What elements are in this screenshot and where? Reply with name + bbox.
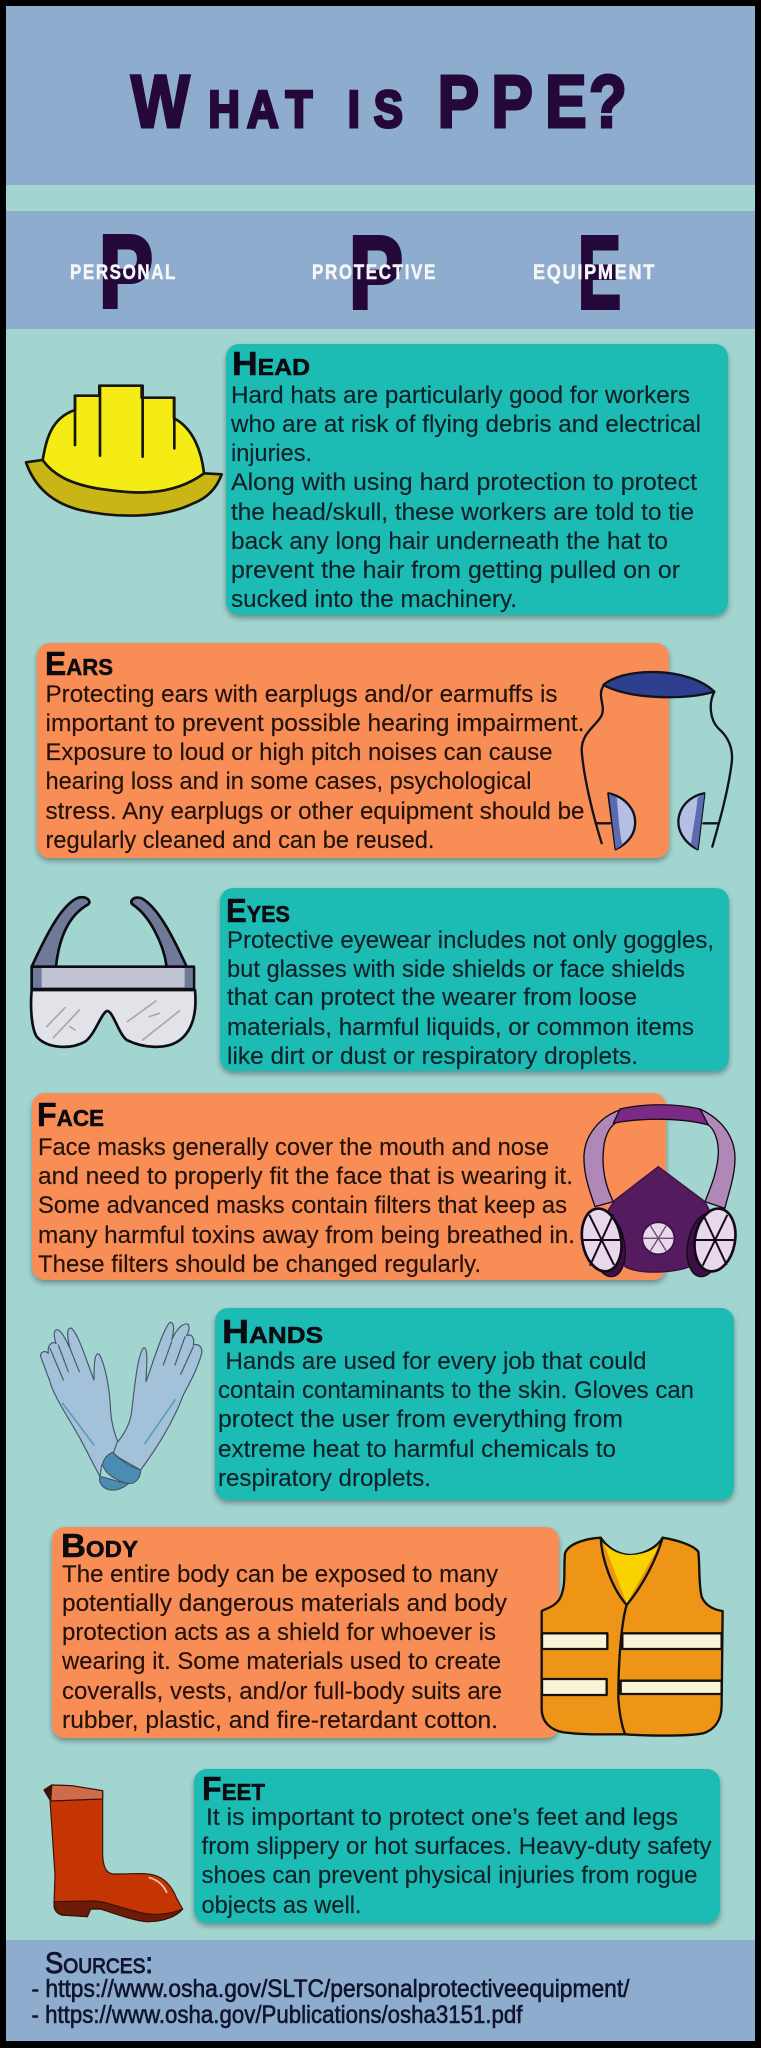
panel: head [226,344,728,615]
text: head body: prevent the hair from getting pulled on or [231,557,680,584]
panel: feet [194,1769,720,1923]
letter E: E [578,215,621,330]
icon: safety goggles [31,897,196,1047]
text: eyes body: materials, harmful liquids, or common items [227,1014,694,1041]
word: personal: PERSONAL [70,261,177,284]
source link 2: - https://www.osha.gov/Publications/osha3151.pdf [32,2001,523,2029]
acronym band [6,211,755,330]
heading: eyes: Eyes [226,892,290,929]
sources band [6,1940,755,2041]
text: eyes body: like dirt or dust or respiratory droplets. [227,1043,638,1070]
source link 1: - https://www.osha.gov/SLTC/personalprotectiveequipment/ [32,1975,630,2003]
text: head body: who are at risk of flying debris and electrical [230,411,701,438]
text: body body: The entire body can be exposed to many [62,1561,499,1588]
text: body body: potentially dangerous materials and body [62,1590,508,1617]
text: face body [38,1134,575,1278]
text: head body: back any long hair underneath the hat to [231,528,668,555]
text: ears body: important to prevent possible hearing impairment. [46,710,584,737]
text: face body: and need to properly fit the face that is wearing it. [38,1163,573,1190]
text: head body [230,382,701,613]
text: head body: Along with using hard protection to protect [231,469,697,496]
panel: eyes [220,888,729,1071]
text: feet body: objects as well. [202,1892,362,1919]
title band [6,6,755,185]
text: hands body: protect the user from everything from [218,1406,623,1433]
text: head body: injuries. [231,440,312,467]
text: body body [61,1561,508,1734]
letter P: P [349,215,403,330]
text: eyes body [227,927,714,1070]
heading: hands: Hands [222,1313,323,1350]
text: hands body [218,1348,694,1492]
icon: hard hat [26,386,222,516]
text: ears body: stress. Any earplugs or other equipment should be [46,798,584,825]
text: feet body: shoes can prevent physical injuries from rogue [202,1862,698,1889]
text: hands body: respiratory droplets. [218,1465,431,1492]
heading: head: Head [232,345,310,382]
panel: body [52,1527,559,1738]
text: eyes body: that can protect the wearer from loose [227,984,637,1011]
heading: body: Body [61,1527,138,1564]
icon: safety vest [542,1538,723,1736]
text: face body: Face masks generally cover the mouth and nose [38,1134,549,1161]
text: body body: wearing it. Some materials used to create [61,1648,501,1675]
panel: ears [37,643,669,858]
text: hands body: Hands are used for every job that could [226,1348,646,1375]
text: feet body: It is important to protect one’s feet and legs [206,1804,678,1831]
letter P: P [99,214,153,329]
icon: safety boot [44,1785,183,1922]
text: eyes body: but glasses with side shields or face shields [227,956,685,983]
text: ears body: Protecting ears with earplugs and/or earmuffs is [46,681,558,708]
text: head body: the head/skull, these workers are told to tie [231,499,694,526]
title: What is PPE? [131,61,627,143]
text: feet body [202,1804,712,1919]
text: body body: coveralls, vests, and/or full-body suits are [62,1678,502,1705]
sources heading: Sources: [45,1947,153,1980]
text: body body: protection acts as a shield for whoever is [62,1619,496,1646]
panel: hands [215,1308,734,1500]
icon: earmuffs [582,672,732,849]
text: face body: Some advanced masks contain filters that keep as [38,1192,567,1219]
text: hands body: extreme heat to harmful chemicals to [218,1436,616,1463]
icon: gloves [41,1322,202,1490]
text: eyes body: Protective eyewear includes not only goggles, [227,927,714,954]
text: face body: many harmful toxins away from being breathed in. [38,1222,575,1249]
text: ears body: Exposure to loud or high pitch noises can cause [46,739,552,766]
panel: face [32,1093,666,1280]
word: equipment: EQUIPMENT [533,261,656,284]
heading: feet: Feet [202,1770,265,1807]
text: head body: Hard hats are particularly good for workers [231,382,690,409]
word: protective: PROTECTIVE [312,261,437,284]
icon: respirator mask [577,1105,740,1280]
text: ears body [46,681,584,854]
heading: face: Face [37,1096,104,1133]
text: feet body: from slippery or hot surfaces. Heavy-duty safety [202,1833,712,1860]
text: hands body: contain contaminants to the skin. Gloves can [218,1377,694,1404]
text: body body: rubber, plastic, and fire-retardant cotton. [62,1707,498,1734]
text: face body: These filters should be changed regularly. [38,1251,481,1278]
heading: ears: Ears [45,645,113,682]
text: ears body: hearing loss and in some cases, psychological [46,768,532,795]
text: ears body: regularly cleaned and can be reused. [46,827,434,854]
text: head body: sucked into the machinery. [231,586,517,613]
